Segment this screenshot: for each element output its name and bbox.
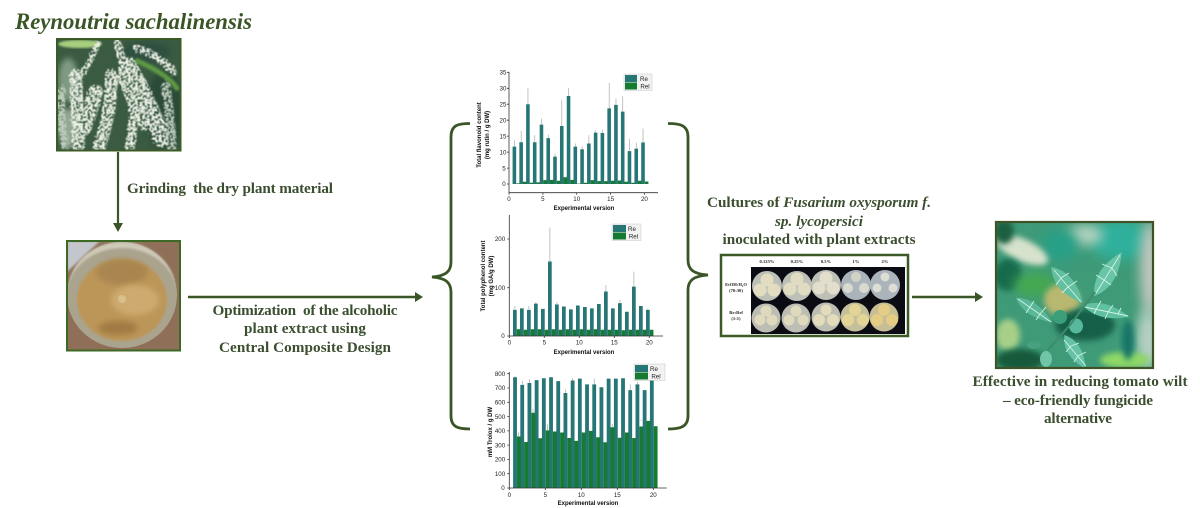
axis title: trolox x: Experimental version — [558, 501, 619, 507]
tick labels: trolox: 5 — [544, 492, 548, 499]
petri: row labels: (1:1) — [731, 316, 741, 321]
legend: trolox — [634, 364, 665, 380]
axes: polyphenol — [507, 215, 663, 338]
text: cultures: Cultures of Fusarium oxysporum f. — [707, 194, 931, 211]
tick labels: trolox: 100 — [495, 471, 506, 478]
tick labels: flavonoid: 10 — [500, 149, 507, 156]
left bracket — [432, 124, 470, 429]
tick labels: trolox: 15 — [614, 492, 621, 499]
tick labels: polyphenol: 200 — [495, 236, 506, 243]
panel: petri dish cultures — [721, 255, 908, 336]
axis title: flavonoid x: Experimental version — [554, 206, 615, 212]
bars: polyphenol — [513, 228, 653, 336]
tick labels: trolox: 800 — [495, 371, 506, 378]
photo: flowering plant — [56, 38, 185, 151]
text: optimization step: Optimization of the alcoholic — [212, 302, 398, 319]
tick labels: polyphenol: 0 — [501, 333, 505, 340]
axes: trolox — [507, 372, 667, 490]
tick labels: flavonoid: 15 — [607, 196, 615, 203]
photo: powdered plant material in bowl — [66, 240, 181, 351]
tick labels: polyphenol: 100 — [495, 285, 506, 292]
text: cultures: sp. lycopersici — [774, 213, 864, 230]
text: optimization step — [212, 302, 398, 356]
petri: dishes row 2 — [752, 302, 898, 332]
text: optimization step: plant extract using — [244, 320, 366, 337]
tick labels: flavonoid — [500, 70, 648, 203]
tick labels: flavonoid: 15 — [500, 133, 507, 140]
tick labels: trolox — [495, 371, 657, 499]
tick labels: trolox: 600 — [495, 400, 506, 406]
petri: row labels: (70:30) — [729, 288, 743, 293]
petri: dishes row 1 — [752, 270, 900, 301]
axis title: flavonoid y: (mg rutin / g DW) — [485, 111, 491, 159]
tick labels: trolox: 500 — [495, 414, 506, 421]
petri: concentration labels: 0.5% — [821, 259, 832, 264]
text: conclusion: alternative — [1044, 410, 1112, 427]
chart: total polyphenol content — [481, 215, 663, 356]
arrow: to tomato result — [912, 292, 983, 302]
petri: black backdrop — [751, 267, 905, 334]
petri: row labels: EtOH:H₂O — [725, 282, 747, 287]
tick labels: polyphenol: 15 — [611, 340, 618, 346]
arrow: grinding — [113, 152, 123, 232]
photo: tomato plant — [992, 220, 1160, 372]
tick labels: trolox: 0 — [501, 485, 505, 492]
bars: trolox — [513, 376, 658, 488]
tick labels: flavonoid: 0 — [502, 181, 506, 188]
petri: concentration labels: 1% — [853, 259, 860, 264]
tick labels: polyphenol: 5 — [543, 340, 547, 346]
tick labels: trolox: 200 — [495, 457, 506, 464]
tick labels: flavonoid: 20 — [641, 196, 648, 203]
tick labels: polyphenol: 10 — [576, 340, 583, 346]
chart: total flavonoid content — [477, 70, 658, 212]
legend: polyphenol: Rel — [629, 234, 638, 240]
axes: flavonoid — [507, 72, 658, 195]
axis title: polyphenol x: Experimental version — [554, 350, 615, 356]
tick labels: polyphenol: 0 — [508, 340, 512, 346]
tick labels: flavonoid: 5 — [541, 196, 545, 203]
petri: concentration labels: 0.125% — [760, 259, 775, 264]
text: cultures — [707, 194, 931, 248]
petri: row labels — [725, 282, 747, 321]
text: cultures: inoculated with plant extracts — [722, 231, 916, 248]
tick labels: flavonoid: 5 — [502, 165, 506, 172]
tick labels: trolox: 700 — [495, 385, 506, 392]
axis title: trolox y: mM Trolox / g DW — [488, 407, 494, 457]
legend: polyphenol — [612, 224, 641, 240]
arrow: to optimization — [188, 292, 423, 302]
text: conclusion — [972, 373, 1188, 427]
chart: antioxidant capacity mM Trolox — [488, 364, 667, 507]
legend: trolox: Re — [650, 366, 659, 373]
tick labels: polyphenol — [495, 236, 653, 346]
tick labels: trolox: 400 — [495, 428, 506, 435]
tick labels: trolox: 300 — [495, 442, 506, 449]
axis title: flavonoid y: Total flavonoid content — [477, 102, 483, 168]
petri: concentration labels — [760, 259, 889, 264]
tick labels: polyphenol: 20 — [646, 340, 653, 346]
tick labels: flavonoid: 20 — [500, 117, 507, 124]
tick labels: flavonoid: 30 — [500, 86, 507, 92]
text: optimization step: Central Composite Design — [219, 339, 392, 356]
tick labels: trolox: 10 — [578, 492, 585, 499]
bars: flavonoid — [513, 83, 648, 184]
legend: flavonoid: Rel — [640, 84, 650, 90]
text: conclusion: Effective in reducing tomato wilt — [972, 373, 1188, 390]
axis title: polyphenol y: (mg GA/g DW) — [489, 256, 495, 296]
text: conclusion: – eco-friendly fungicide — [1002, 392, 1153, 409]
tick labels: flavonoid: 35 — [500, 70, 507, 76]
tick labels: flavonoid: 25 — [500, 101, 507, 108]
title: Reynoutria sachalinensis — [14, 9, 252, 34]
petri: concentration labels: 2% — [882, 259, 889, 264]
legend: flavonoid — [624, 74, 652, 90]
legend: flavonoid: Re — [640, 76, 649, 83]
petri: concentration labels: 0.25% — [791, 259, 804, 264]
tick labels: trolox: 0 — [508, 492, 512, 499]
tick labels: trolox: 20 — [650, 492, 657, 499]
tick labels: flavonoid: 0 — [507, 196, 511, 203]
axis title: polyphenol y: Total polyphenol content — [481, 241, 487, 311]
legend: polyphenol: Re — [628, 226, 637, 233]
petri: row labels: Re:Rel — [729, 310, 743, 315]
tick labels: flavonoid: 10 — [573, 196, 581, 203]
legend: trolox: Rel — [651, 374, 661, 380]
right bracket — [668, 124, 708, 429]
label: grinding step: Grinding the dry plant material — [127, 180, 333, 197]
